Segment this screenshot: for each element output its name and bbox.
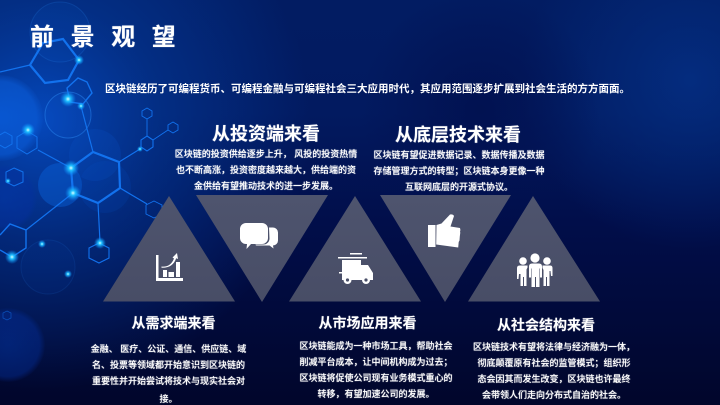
body: base technology: 存储管理方式的转型；区块链本身更像一种 [373, 166, 544, 176]
body: social structure: 会带领人们走向分布式自治的社会。 [482, 390, 626, 400]
intro text: 区块链经历了可编程货币、可编程金融与可编程社会三大应用时代，其应用范围逐步扩展到社会生活的方方面面。 [105, 83, 630, 95]
body: demand side: 金融、 医疗、公证、通信、供应链、域 [91, 344, 246, 354]
body: demand side: 重要性并开始尝试将技术与现实社会对 [92, 376, 245, 386]
body: investment side: 区块链的投资供给逐步上升， 风投的投资热情 [175, 149, 357, 159]
body: social structure [473, 342, 635, 400]
body: social structure: 态会因其而发生改变，区块链也许最终 [477, 374, 630, 384]
triangle 5: social structure with people icon [468, 196, 600, 302]
body: demand side: 接。 [159, 394, 178, 404]
body: demand side [90, 344, 246, 404]
body: investment side [175, 148, 358, 191]
body: market application [299, 340, 452, 399]
heading: base technology: 从底层技术来看 [395, 125, 521, 145]
heading: market application: 从市场应用来看 [318, 315, 416, 331]
body: social structure: 彻底颠覆原有社会的监管模式；组织形 [477, 358, 630, 368]
body: base technology: 互联网底层的开源式协议。 [405, 182, 513, 192]
block: base technology [373, 124, 545, 192]
body: investment side: 也不断高涨，投资密度越来越大，供给端的资 [176, 165, 356, 175]
body: investment side: 金供给有望推动技术的进一步发展。 [194, 181, 338, 191]
body: market application: 削减平台成本，让中间机构成为过去； [299, 357, 452, 367]
body: social structure: 区块链技术有望将法律与经济融为一体， [473, 342, 635, 352]
triangle 4: base technology with thumbs up icon [380, 195, 511, 302]
body: demand side: 名、投票等领域都开始意识到区块链的 [92, 360, 245, 370]
block: demand side [90, 315, 246, 404]
body: market application: 转移，有望加速公司的发展。 [317, 389, 434, 399]
heading: investment side: 从投资端来看 [212, 124, 320, 144]
triangle 1: demand side with chart icon [103, 196, 235, 302]
icon: delivery truck [338, 253, 373, 284]
icon: thumbs up [428, 214, 460, 248]
icon: growth chart [156, 253, 183, 281]
icon: speech bubbles [240, 223, 278, 249]
heading: social structure: 从社会结构来看 [497, 317, 595, 333]
icon: group of people [517, 253, 552, 287]
block: investment side [175, 124, 358, 191]
body: base technology [373, 150, 545, 192]
body: market application: 区块链将促使公司现有业务模式重心的 [299, 373, 452, 383]
triangle 2: investment side with speech bubbles icon [196, 195, 328, 302]
body: market application: 区块链能成为一种市场工具，帮助社会 [299, 341, 452, 351]
body: base technology: 区块链有望促进数据记录、数据传播及数据 [373, 150, 544, 160]
block: market application [299, 315, 452, 399]
block: social structure [473, 317, 635, 400]
title: 前景观望 [30, 24, 192, 51]
triangle 3: market application with truck icon [289, 196, 421, 302]
heading: demand side: 从需求端来看 [132, 315, 216, 331]
